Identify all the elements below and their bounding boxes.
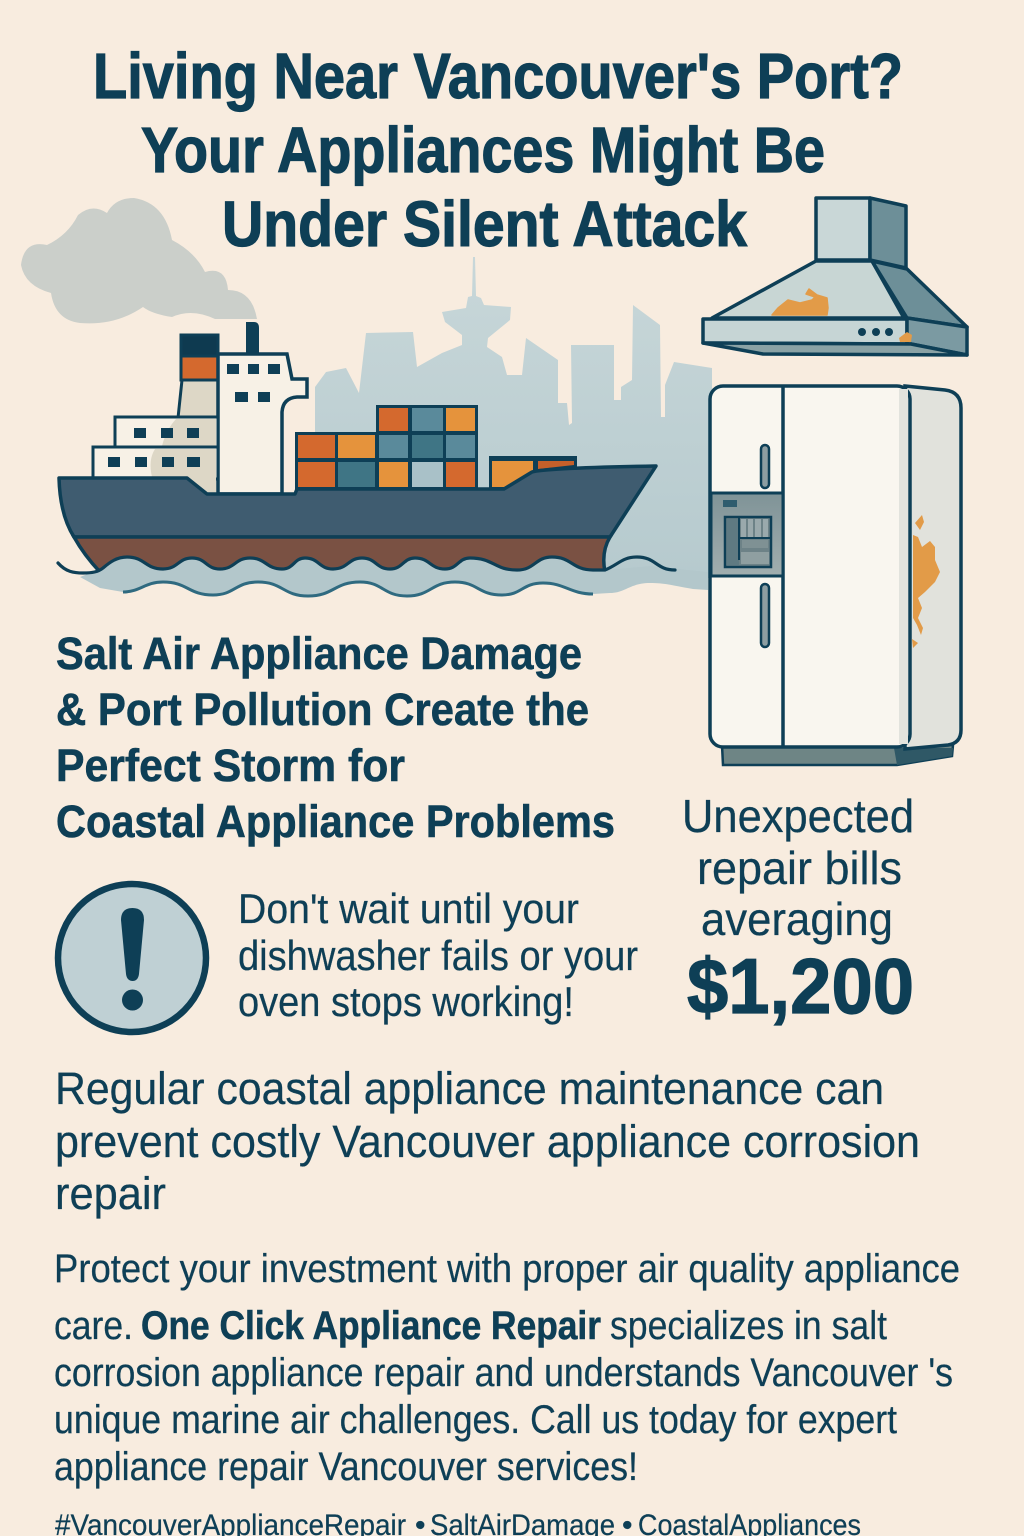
service description text — [54, 1247, 960, 1489]
title: Living Near Vancouver's Port? — [93, 40, 903, 112]
subheading: & Port Pollution Create the — [56, 684, 589, 735]
wave lines — [58, 557, 675, 596]
service description text: unique marine air challenges. Call us today for expert — [54, 1398, 897, 1442]
hood front band — [703, 318, 967, 355]
range hood — [703, 198, 967, 355]
cargo ship — [59, 322, 656, 572]
ship lower hull — [74, 537, 610, 572]
rust patch on fridge side — [912, 515, 940, 648]
warning text: dishwasher fails or your — [238, 932, 638, 979]
title: Under Silent Attack — [222, 188, 747, 260]
shipping containers — [295, 405, 577, 490]
maintenance text: repair — [55, 1168, 166, 1219]
service description text: care. — [54, 1304, 133, 1348]
subheading — [56, 628, 615, 847]
title — [93, 40, 903, 260]
smoke cloud — [21, 198, 257, 323]
ship hull — [59, 466, 656, 537]
city skyline silhouette — [315, 257, 712, 578]
service description text: Protect your investment with proper air quality appliance — [54, 1247, 960, 1291]
maintenance text: prevent costly Vancouver appliance corrosion — [55, 1116, 920, 1167]
service description text: One Click Appliance Repair — [141, 1304, 601, 1348]
hood control buttons — [858, 328, 893, 336]
ship funnel — [178, 335, 218, 418]
rust patch on hood canopy — [772, 289, 828, 315]
repair cost callout: averaging — [701, 893, 893, 945]
repair cost callout: repair bills — [697, 842, 902, 894]
maintenance text — [55, 1063, 920, 1219]
ship deck cabins — [93, 417, 218, 494]
fridge handles — [761, 445, 769, 647]
fridge side panel — [905, 386, 961, 749]
icon: warning exclamation — [58, 884, 206, 1032]
repair cost callout — [682, 790, 914, 1030]
repair cost callout: Unexpected — [682, 790, 914, 842]
refrigerator — [710, 386, 961, 765]
warning text: oven stops working! — [238, 978, 574, 1025]
subheading: Perfect Storm for — [56, 740, 405, 791]
fridge front doors — [710, 386, 910, 747]
subheading: Coastal Appliance Problems — [56, 796, 615, 847]
fridge base — [722, 745, 953, 765]
water — [80, 557, 708, 596]
service description text: specializes in salt — [610, 1304, 887, 1348]
warning text: Don't wait until your — [238, 885, 579, 932]
hood canopy — [712, 261, 967, 327]
hashtags — [55, 1509, 861, 1536]
title: Your Appliances Might Be — [141, 114, 825, 186]
hood duct — [816, 198, 906, 268]
repair cost figure: $1,200 — [687, 942, 914, 1030]
warning text — [238, 885, 638, 1025]
ship stack — [246, 322, 259, 356]
ship bridge tower — [218, 354, 307, 494]
maintenance text: Regular coastal appliance maintenance can — [55, 1063, 884, 1114]
water dispenser — [711, 493, 783, 576]
service description text: appliance repair Vancouver services! — [54, 1445, 638, 1489]
subheading: Salt Air Appliance Damage — [56, 628, 582, 679]
rust patch on hood corner — [899, 332, 912, 342]
